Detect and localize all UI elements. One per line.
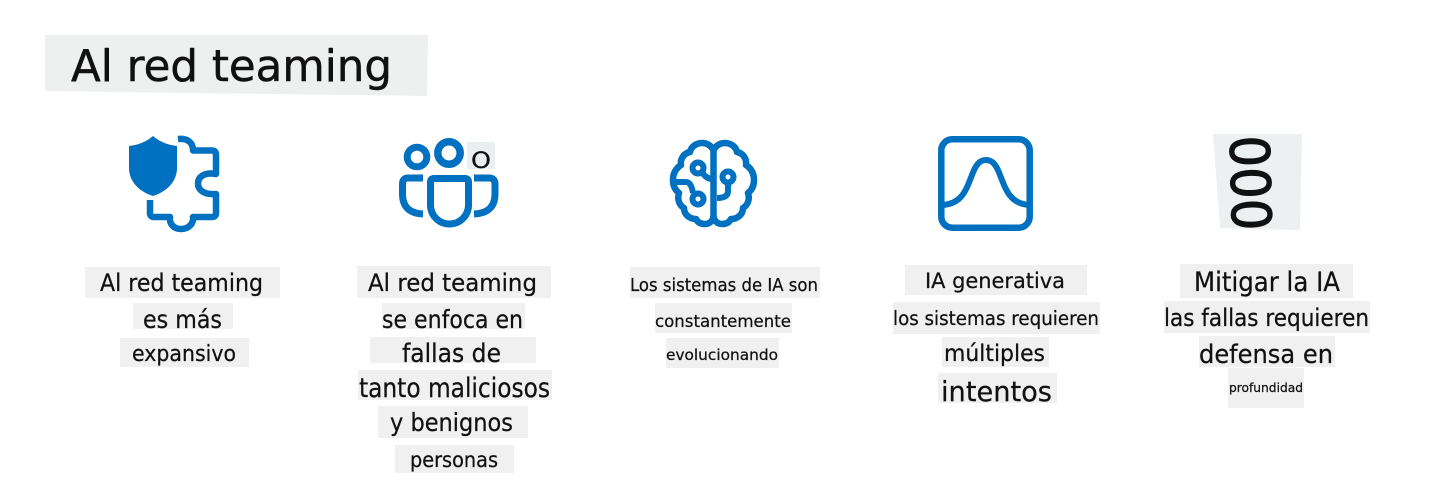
text: AI systems are constantly evolving: evolucionando <box>666 346 778 364</box>
text: AI systems are constantly evolving: Los sistemas de IA son <box>630 276 818 296</box>
text: AI systems are constantly evolving <box>630 267 820 368</box>
text: generative AI requires multiple attempts: IA generativa <box>925 269 1065 293</box>
panel: defense in depth <box>1164 134 1370 408</box>
text: mitigating AI failures requires defense in depth: defensa en <box>1199 340 1333 370</box>
icon: shield and puzzle piece <box>129 136 216 229</box>
text: mitigating AI failures requires defense in depth: profundidad <box>1229 380 1303 395</box>
text: AI red teaming is more expansive: Al red teaming <box>100 269 263 297</box>
text: AI red teaming focuses on failures: y benignos <box>390 408 513 437</box>
text: AI red teaming focuses on failures <box>357 266 552 473</box>
text: AI red teaming focuses on failures: Al red teaming <box>368 269 537 297</box>
text: AI red teaming focuses on failures: fallas de <box>402 339 501 369</box>
text: generative AI requires multiple attempts: los sistemas requieren <box>893 307 1099 330</box>
text: AI red teaming is more expansive: es más <box>143 305 222 334</box>
icon: group of people: O <box>471 149 491 174</box>
title: Al red teaming <box>71 41 392 92</box>
text: AI red teaming is more expansive: expansivo <box>132 341 236 367</box>
text: generative AI requires multiple attempts: múltiples <box>944 339 1045 367</box>
icon: bell curve in a square <box>941 139 1030 228</box>
text: mitigating AI failures requires defense in depth: Mitigar la IA <box>1194 267 1340 298</box>
text: generative AI requires multiple attempts <box>893 265 1100 408</box>
panel: evolving systems <box>630 143 820 368</box>
text: mitigating AI failures requires defense in depth <box>1164 264 1370 408</box>
text: mitigating AI failures requires defense in depth: las fallas requieren <box>1164 304 1369 332</box>
text: AI systems are constantly evolving: constantemente <box>655 312 791 332</box>
icon: three rotated zeros <box>1213 134 1302 231</box>
text: AI red teaming focuses on failures: tanto maliciosos <box>359 373 550 404</box>
icon: three rotated zeros: 000 <box>1217 135 1282 231</box>
panel: malicious and benign <box>357 142 552 473</box>
text: generative AI requires multiple attempts: intentos <box>941 375 1052 408</box>
panel: multiple attempts <box>893 139 1100 408</box>
text: AI red teaming is more expansive <box>85 267 280 367</box>
text: AI red teaming focuses on failures: se enfoca en <box>382 305 523 334</box>
icon: group of people <box>402 142 495 224</box>
panel: expansive <box>85 136 280 367</box>
icon: brain with circuits <box>673 143 754 224</box>
text: AI red teaming focuses on failures: personas <box>410 448 498 473</box>
